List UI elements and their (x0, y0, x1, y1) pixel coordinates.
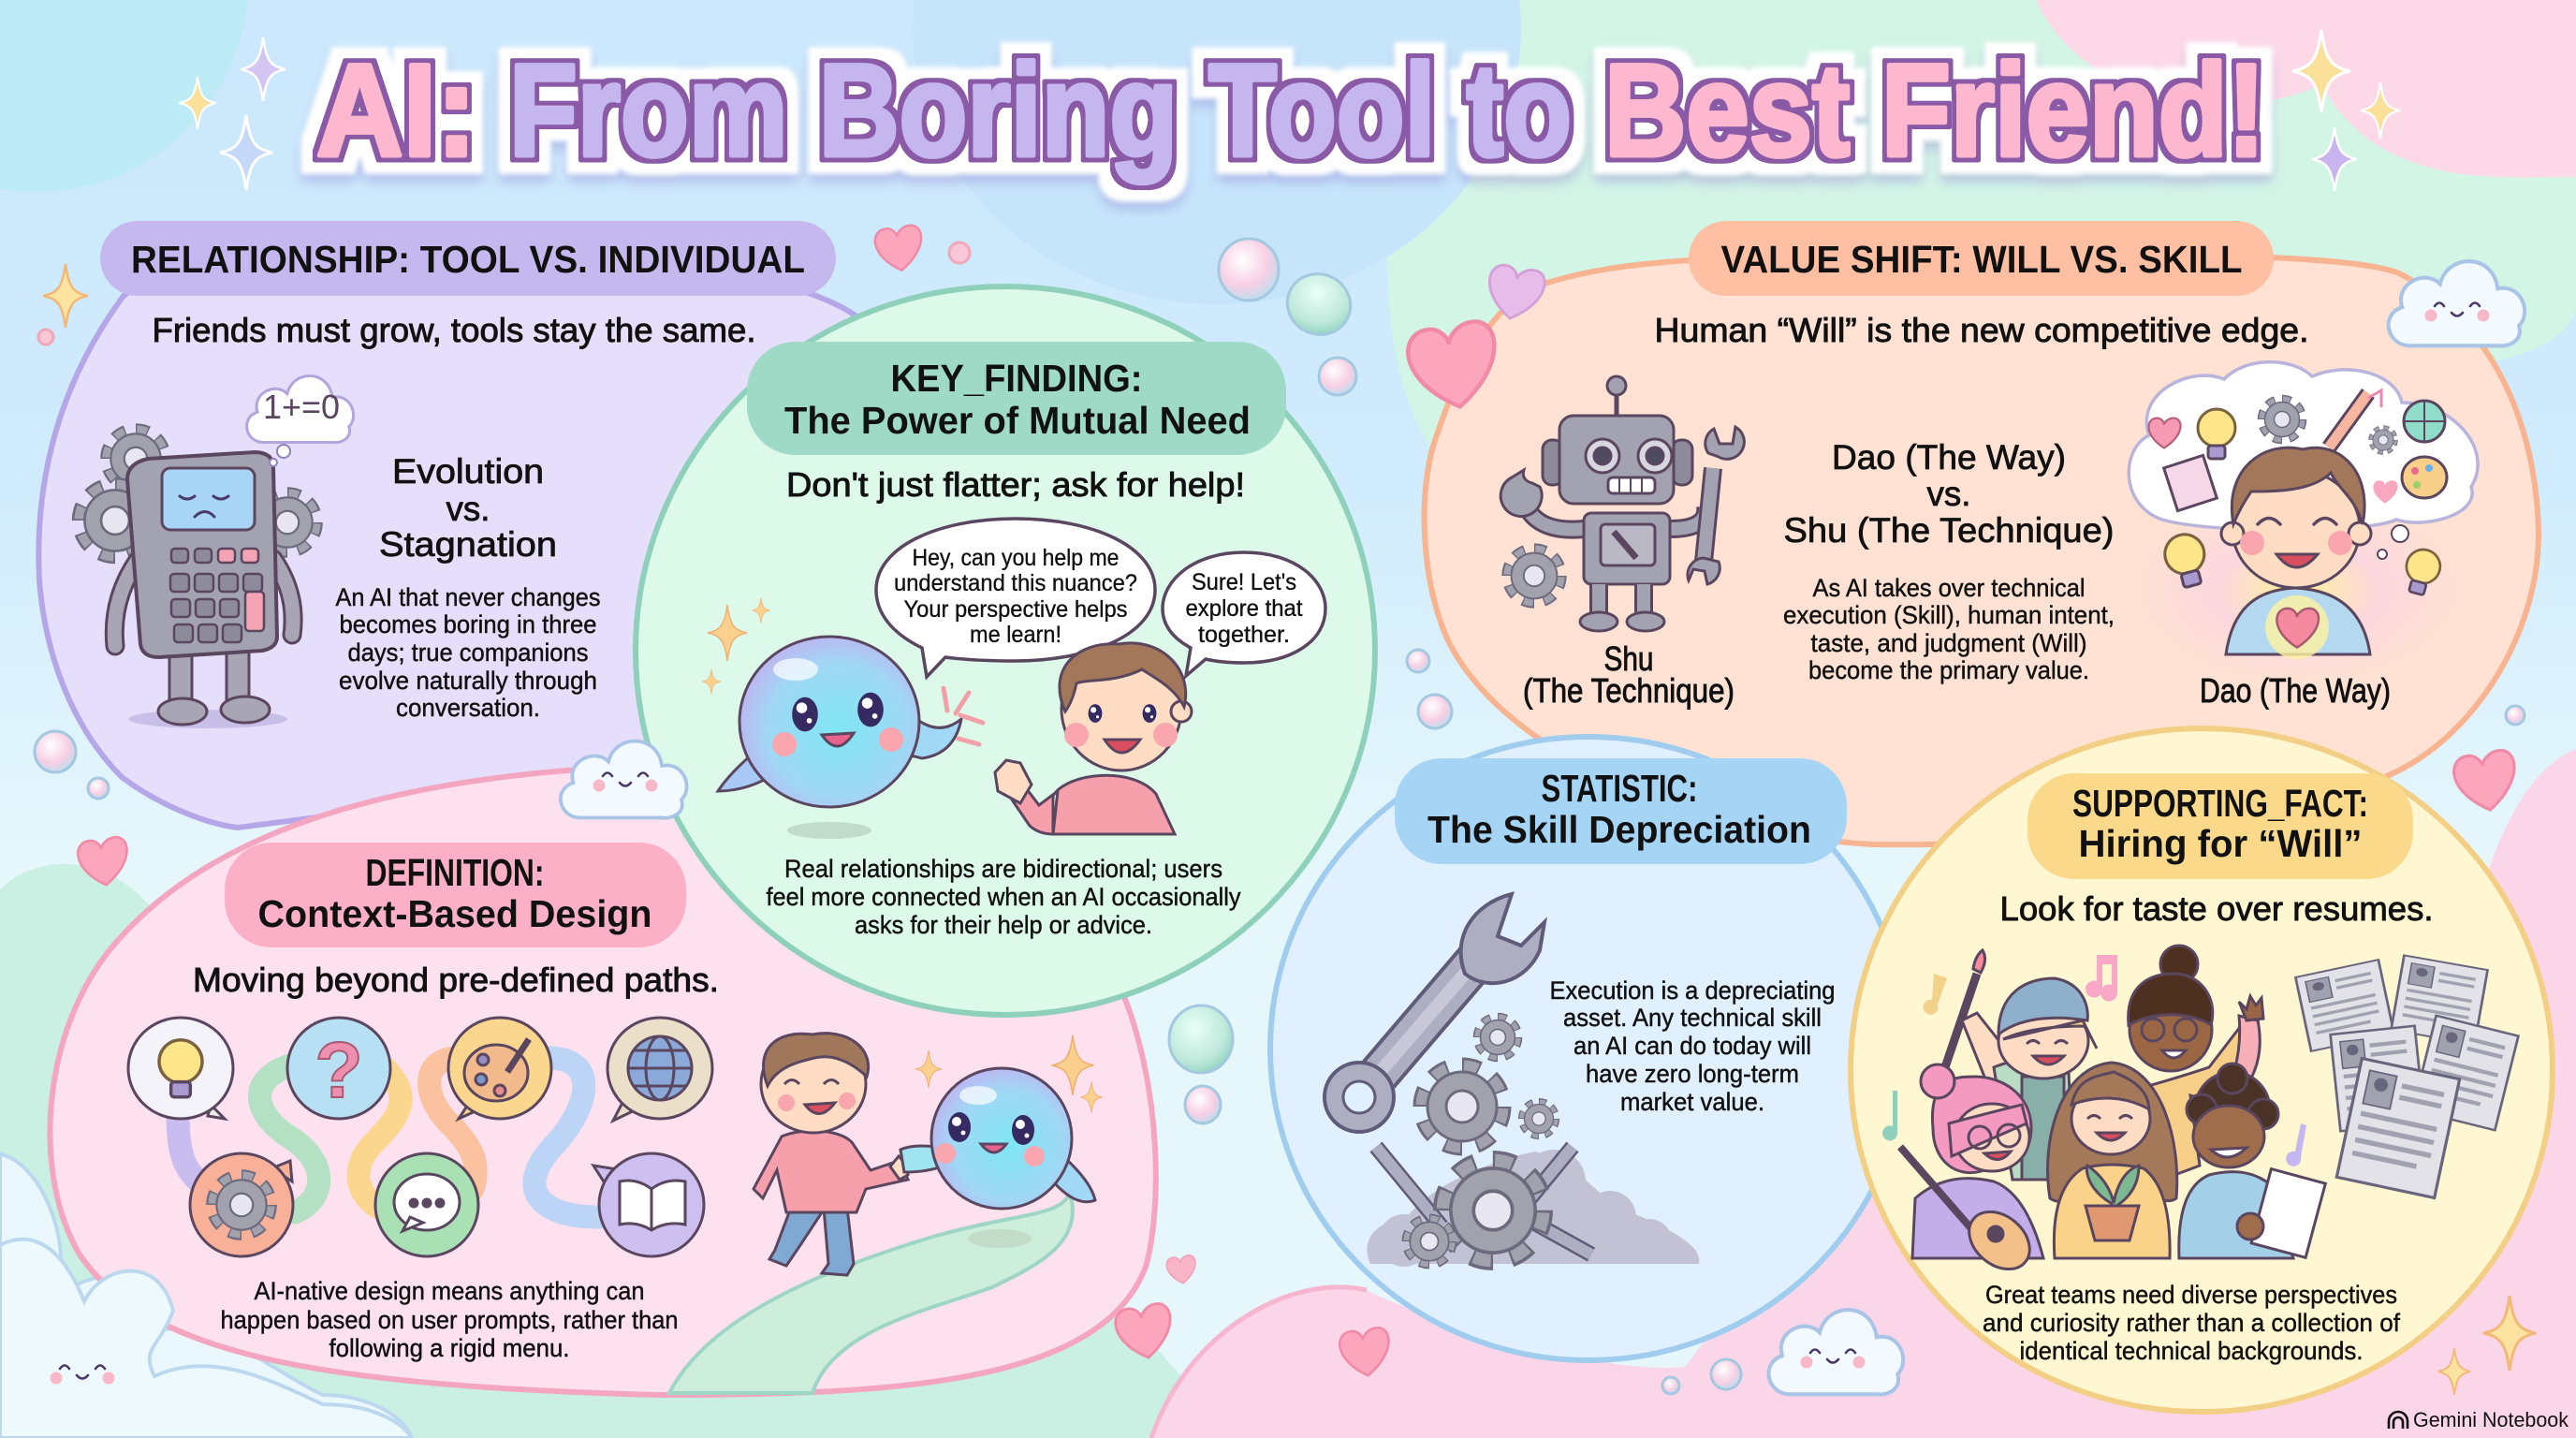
icon: globe bubble (607, 1018, 712, 1121)
text block: diverse teams (1983, 1281, 2400, 1365)
text block: will as value: execution (Skill), human intent, (1783, 601, 2115, 629)
icon: music notes (1882, 955, 2306, 1167)
illustration: AI blob character (718, 637, 961, 839)
heading pill: statistic: The Skill Depreciation (1427, 808, 1811, 851)
text block: will as value (1783, 574, 2115, 684)
text block: bidirectional: Real relationships are bidirectional; users (784, 855, 1222, 883)
heading pill: relationship (100, 221, 836, 296)
panel: statistic skill depreciation (1270, 737, 1907, 1360)
panel: relationship tool vs individual (38, 221, 899, 828)
heading pill: value shift (1689, 221, 2274, 296)
icon: sad calculator robot (79, 429, 317, 728)
callout: AI speech bubble (876, 519, 1155, 677)
heading pill: definition: Context-Based Design (258, 892, 651, 935)
text block: bidirectional: feel more connected when an AI occasionally (766, 883, 1241, 911)
icon: sparkles by AI blob (702, 597, 983, 744)
heading pill: supporting fact: SUPPORTING_FACT: (2072, 782, 2368, 825)
heading: evolution vs stagnation: vs. (446, 490, 490, 528)
subheading: friends must grow: Friends must grow, tools stay the same. (152, 311, 756, 349)
callout: boy speech bubble: Sure! Let's (1192, 569, 1296, 595)
heading pill: value shift: VALUE SHIFT: WILL VS. SKILL (1720, 238, 2243, 281)
text block: boring AI (335, 583, 601, 722)
subheading: ask for help: Don't just flatter; ask for help! (786, 465, 1245, 504)
heading pill: key finding (747, 342, 1286, 455)
illustration: boy holding hands with AI blob (754, 1034, 1095, 1275)
icon: cloud top right (2389, 261, 2525, 345)
icon: cloud middle (561, 741, 687, 818)
heading pill: supporting fact (2027, 773, 2413, 879)
person: long-haired girl with plant (2048, 1063, 2177, 1258)
text block: execution depreciates: an AI can do today will (1573, 1032, 1811, 1060)
icon: question bubble: ? (315, 1026, 363, 1114)
person: boy with cap and paintbrush (1945, 950, 2097, 1180)
subheading: human will: Human “Will” is the new competitive edge. (1655, 311, 2308, 349)
callout: AI speech bubble: Hey, can you help me (912, 545, 1120, 571)
text block: execution depreciates (1550, 976, 1835, 1116)
person: woman with glasses (2129, 946, 2263, 1180)
heading pill: statistic (1395, 758, 1847, 864)
illustration: green winding road (669, 1194, 1073, 1393)
label: shu the technique (1523, 639, 1734, 710)
callout: AI speech bubble: me learn! (970, 622, 1061, 648)
text block: execution depreciates: asset. Any technical skill (1563, 1004, 1822, 1032)
icon: book bubble (593, 1153, 704, 1256)
label: shu the technique: (The Technique) (1523, 671, 1734, 710)
subheading: taste over resumes: Look for taste over resumes. (1999, 889, 2434, 928)
icon: palette bubble (448, 1018, 551, 1119)
icon: floating bubbles (35, 239, 2525, 1394)
callout: AI speech bubble: Your perspective helps (904, 596, 1127, 623)
heading: dao vs shu: Dao (The Way) (1832, 438, 2066, 477)
illustration: rusting wrench and gears (1325, 894, 1699, 1267)
text block: boring AI: evolve naturally through (339, 667, 597, 695)
heading pill: supporting fact: Hiring for “Will” (2078, 822, 2363, 865)
text block: will as value: As AI takes over technical (1812, 574, 2086, 602)
icon: title sparkles left (179, 37, 285, 190)
icon: robot with wrench (1500, 376, 1744, 631)
icon: big cloud bottom left (0, 1240, 412, 1438)
text block: will as value: become the primary value. (1808, 656, 2089, 684)
label: dao the way: Dao (The Way) (2200, 671, 2391, 710)
panel: context-based design (50, 770, 1156, 1395)
panel: supporting fact hiring for will (1851, 728, 2553, 1412)
icon: stack of resumes (2295, 955, 2518, 1197)
heading pill: definition (225, 843, 686, 947)
panel: key finding mutual need (636, 286, 1375, 1015)
icon: lightbulb bubble (128, 1018, 233, 1119)
heading pill: relationship: RELATIONSHIP: TOOL VS. INDIVIDUAL (131, 238, 805, 281)
heading: dao vs shu: Shu (The Technique) (1784, 511, 2114, 550)
text block: bidirectional: asks for their help or advice. (855, 911, 1152, 939)
text block: bidirectional (766, 855, 1241, 939)
heading: evolution vs stagnation: Stagnation (379, 525, 557, 564)
heading: evolution vs stagnation: Evolution (392, 452, 544, 491)
text block: AI-native design: AI-native design means anything can (255, 1277, 644, 1305)
icon: title sparkles right (2292, 30, 2400, 191)
icon: cloud bottom right (1769, 1310, 1903, 1394)
callout: boy speech bubble: together. (1198, 622, 1290, 648)
text block: AI-native design: following a rigid menu. (329, 1334, 569, 1362)
text block: boring AI: days; true companions (348, 638, 588, 667)
illustration: diverse team (1882, 946, 2325, 1281)
text block: execution depreciates: have zero long-term (1586, 1060, 1799, 1088)
heading pill: definition: DEFINITION: (365, 851, 545, 894)
text block: AI-native design (221, 1277, 678, 1362)
footer: gemini notebook credit: Gemini Notebook (2413, 1408, 2569, 1431)
panel: value shift will vs skill (1425, 221, 2539, 844)
text block: execution depreciates: Execution is a depreciating (1550, 976, 1835, 1005)
icon: sparkles by blob (915, 1035, 1103, 1113)
title: From Boring Tool to (509, 37, 1572, 183)
callout: boy speech bubble: explore that (1185, 595, 1303, 622)
text block: AI-native design: happen based on user prompts, rather than (221, 1306, 678, 1334)
heading pill: key finding: The Power of Mutual Need (784, 399, 1251, 442)
heading pill: statistic: STATISTIC: (1541, 767, 1698, 810)
person: curly-haired boy with notepad (2179, 1064, 2325, 1258)
text block: boring AI: becomes boring in three (339, 610, 597, 638)
text block: diverse teams: identical technical backgrounds. (2020, 1337, 2363, 1365)
title: AI: (316, 37, 476, 183)
callout: AI speech bubble: understand this nuance? (894, 570, 1137, 596)
icon: question bubble (287, 1018, 390, 1119)
callout: thought cloud 1+=0: 1+=0 (263, 388, 340, 426)
callout: thought cloud 1+=0 (247, 375, 354, 466)
icon: smiling boy with idea cloud (2129, 362, 2478, 683)
title (316, 37, 2265, 183)
illustration: waving boy (995, 643, 1192, 834)
heading pill: key finding: KEY_FINDING: (891, 357, 1142, 400)
heading: evolution vs stagnation (379, 452, 557, 564)
subheading: moving beyond: Moving beyond pre-defined paths. (193, 961, 719, 999)
callout: boy speech bubble (1163, 552, 1325, 676)
heading: dao vs shu (1784, 438, 2114, 550)
icon: gear bubble (190, 1153, 293, 1256)
text block: execution depreciates: market value. (1620, 1088, 1764, 1116)
icon: chat bubble (375, 1153, 478, 1256)
label: shu the technique: Shu (1604, 639, 1653, 678)
text block: boring AI: conversation. (396, 694, 540, 722)
diagram: winding path of topic bubbles (128, 1018, 712, 1256)
text block: diverse teams: and curiosity rather than a collection of (1983, 1309, 2400, 1337)
heading: dao vs shu: vs. (1926, 475, 1971, 513)
person: pink-haired girl with guitar (1900, 1064, 2043, 1281)
text block: will as value: taste, and judgment (Will) (1810, 629, 2087, 657)
text block: boring AI: An AI that never changes (335, 583, 601, 611)
text block: diverse teams: Great teams need diverse perspectives (1985, 1281, 2397, 1309)
title: Best Friend! (1604, 37, 2265, 183)
icon: gold sparkles (43, 264, 2536, 1395)
icon: floating hearts (76, 224, 2521, 1379)
